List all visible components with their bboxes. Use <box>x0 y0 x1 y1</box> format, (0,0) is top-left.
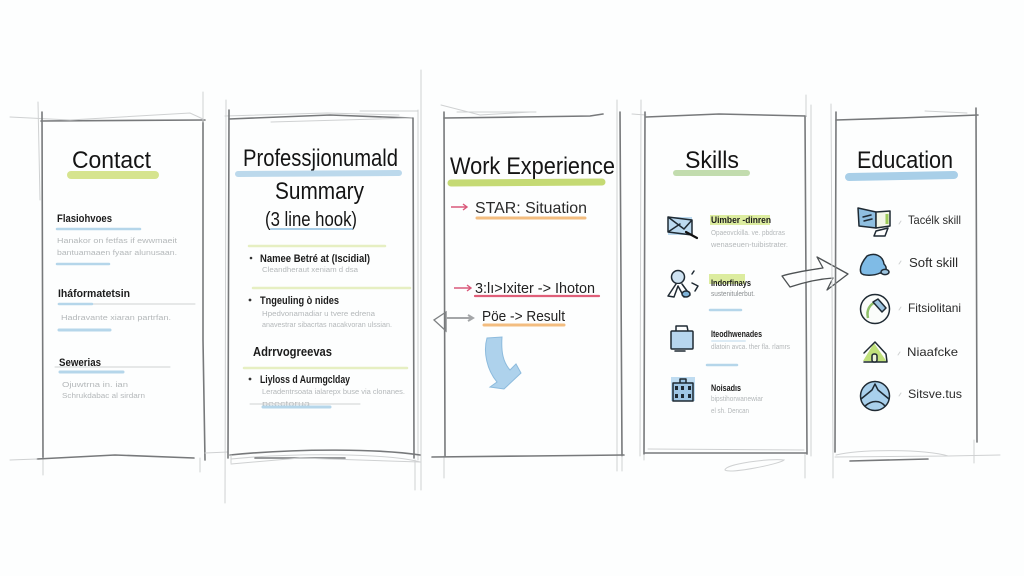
underline: hook <box>271 228 352 230</box>
panel: education <box>831 104 1000 478</box>
heading: Contact: Contact <box>72 147 151 174</box>
text block: skill two <box>709 274 755 310</box>
panel frame: work experience <box>432 100 624 478</box>
text block: skill two: Indorfinays <box>711 278 751 289</box>
text block: skill three <box>707 329 790 365</box>
list item: first summary bullet <box>249 246 385 274</box>
list item: first summary bullet: Cleandheraut xeniam d dsa <box>262 267 358 274</box>
panel: skills <box>632 95 811 478</box>
list item: second summary bullet: Hpedvonamadiar u tvere edrena <box>262 311 375 318</box>
heading: Professional Summary: Professjionumald <box>243 145 398 172</box>
heading: Professional Summary <box>243 145 398 231</box>
highlight: Contact <box>71 171 155 179</box>
caret <box>899 261 901 264</box>
arrow: large outlined arrow from skills to education <box>782 257 848 290</box>
subheading: achievements: Adrrvogreevas <box>253 344 332 359</box>
text block: third contact item: Sewerias <box>59 357 101 369</box>
text block: first contact item: Flasiohvoes <box>57 213 112 225</box>
text block: third contact item: Ojuwtrna in. ian <box>62 382 128 389</box>
text: STAR Situation: STAR: Situation <box>475 200 587 217</box>
text: item five: Sitsve.tus <box>908 387 962 401</box>
list item: first summary bullet: Namee Betré at (Iscidial) <box>260 253 370 265</box>
panel frame: skills <box>632 95 811 478</box>
panel frame: professional summary <box>225 70 421 503</box>
caret <box>899 221 901 224</box>
text block: skill four <box>711 383 764 415</box>
text block: skill one: Opaeovckilla. ve. pbdcras <box>711 230 785 237</box>
caret <box>899 307 901 310</box>
caret <box>899 393 901 396</box>
panel frame: contact <box>10 92 228 475</box>
list item: second summary bullet: Tngeuling ò nides <box>260 295 339 307</box>
icon: blob <box>860 254 889 275</box>
heading: Professional Summary: Summary <box>275 178 364 205</box>
list item: second summary bullet <box>249 288 410 329</box>
text block: skill two: sustenitulerbut. <box>711 291 755 298</box>
text block: skill one: wenaseuen-tuibistrater. <box>710 242 788 249</box>
underline: result <box>484 324 564 326</box>
text block: second contact item: Iháformatetsin <box>58 288 130 300</box>
icon: circle with leaf <box>860 294 890 324</box>
text block: skill four: bipstihorwanewiar <box>711 396 764 403</box>
heading: Education: Education <box>857 147 953 174</box>
arrow: situation <box>451 204 467 210</box>
text block: skill four: el sh. Dencan <box>711 408 749 415</box>
text block: third contact item: Schrukdabac al sirdarn <box>62 393 145 400</box>
list item: third summary bullet: Liyloss d Aurmgclday <box>260 374 351 386</box>
highlight: Education <box>849 175 954 177</box>
text block: skill four: Noisadıs <box>711 383 741 393</box>
arrow: blue down arrow <box>485 337 521 389</box>
heading: Work Experience: Work Experience <box>450 153 615 180</box>
text: technical skill: Tacélk skill <box>908 213 961 227</box>
text: result: Pöe -> Result <box>482 308 566 325</box>
icon: blue circle <box>860 382 890 410</box>
arrow: action <box>454 285 471 291</box>
highlight: Work Experience <box>451 182 602 183</box>
text: item four: Niaafcke <box>907 345 958 359</box>
icon: green house <box>863 342 887 362</box>
highlight: Skills <box>676 170 747 176</box>
icon: building <box>671 377 695 401</box>
icon: book <box>858 208 890 236</box>
underline: situation <box>477 216 585 220</box>
arrow: result pointer <box>434 312 473 331</box>
list item: third summary bullet: peectorua <box>262 401 310 408</box>
icon: person <box>668 270 698 297</box>
panel: professional summary <box>225 70 421 503</box>
text block: first contact item: Hanakor on fetfas if ewwmaeit <box>57 238 177 245</box>
text block: skill one <box>710 215 788 249</box>
heading: Professional Summary: (3 line hook) <box>265 209 357 231</box>
panel: contact <box>10 92 228 475</box>
text block: first contact item: bantuamaaen fyaar alunusaan. <box>57 250 177 257</box>
text block: skill one: Uimber -dinren <box>711 215 771 225</box>
text block: first contact item <box>57 213 177 264</box>
list item: third summary bullet <box>244 368 407 408</box>
text block: third contact item <box>55 357 170 400</box>
icon: envelope with magnifier <box>668 217 697 238</box>
highlight: Professional <box>238 173 399 174</box>
text block: second contact item: Hadravante xiaran partrfan. <box>61 315 171 322</box>
panel: work experience <box>432 100 624 478</box>
icon: suitcase <box>671 326 693 351</box>
text: item three: Fitsiolitani <box>908 301 961 315</box>
text block: second contact item <box>58 288 195 330</box>
underline: action <box>475 295 599 297</box>
list item: second summary bullet: anavestrar sibacrtas nacakvoran ulssian. <box>262 322 392 329</box>
heading: Skills: Skills <box>685 147 739 174</box>
list item: third summary bullet: Leradentrsoata ialarepx buse via clonanes. <box>262 389 405 396</box>
caret <box>898 352 900 355</box>
text: soft skill: Soft skill <box>909 255 958 270</box>
text block: skill three: dlatoin avca. ther fla. rlamrs <box>711 344 790 351</box>
text block: skill three: Iteodhwenades <box>711 329 762 339</box>
text: task action: 3:lı>Ixiter -> Ihoton <box>475 280 595 297</box>
panel frame: education <box>831 104 1000 478</box>
